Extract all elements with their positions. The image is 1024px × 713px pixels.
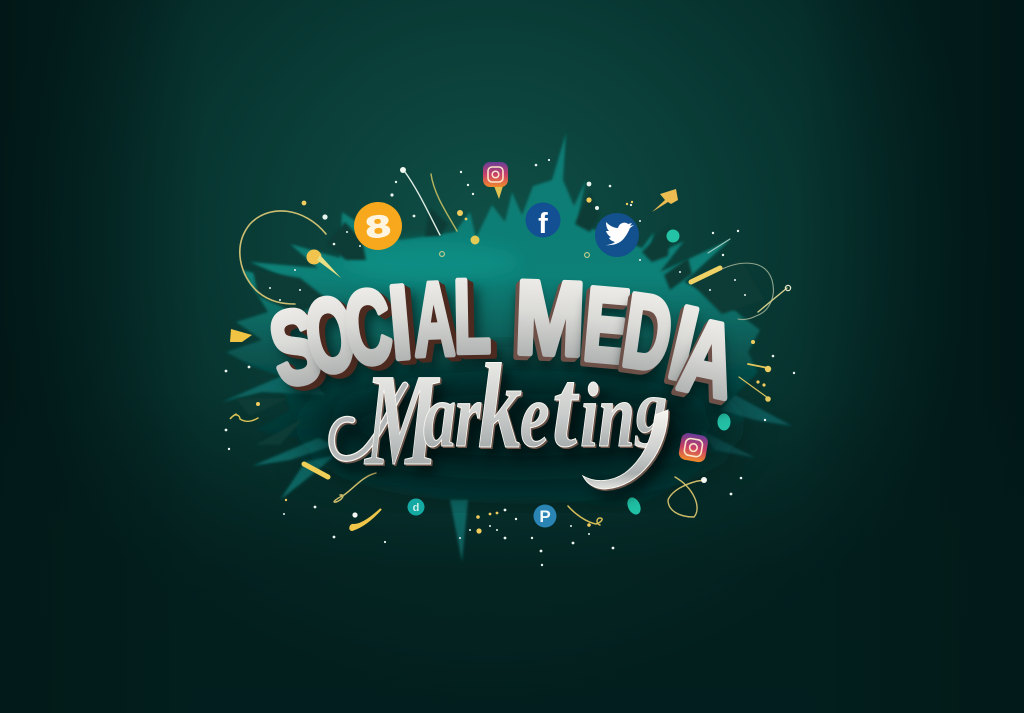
deep shadow behind lettering [310,370,730,480]
letter k: k [478,338,522,473]
pin left [306,250,322,264]
lower left squiggle [230,414,258,421]
yellow dash lower left [304,464,328,477]
word: MEDIA [513,259,746,421]
teal glow top [340,242,520,282]
letter t: t [552,347,579,470]
icon: facebook: f [538,208,548,240]
lower curl [568,506,602,525]
icon: pinterest [534,504,556,528]
word: MEDIA: M [513,259,587,377]
word: SOCIAL: O [298,275,363,397]
word: MEDIA: D [617,273,679,393]
word: SOCIAL: A [412,260,456,378]
letter a: a [423,366,456,467]
letter g: g [634,366,667,448]
icon: instagram lower [678,432,709,463]
decorative sparkles [225,159,795,566]
teal dots: d [413,502,419,514]
swash: g descender [583,410,668,489]
word: SOCIAL: S [261,285,330,409]
teal dots [408,230,730,517]
yellow swoosh lower [350,509,381,530]
word: SOCIAL: I [385,264,416,382]
lower loop line [334,473,376,502]
word: MEDIA: E [580,265,634,385]
white streak top [405,172,440,235]
icon: twitter [595,213,639,257]
icon: facebook [526,202,560,240]
right hook line [716,263,773,320]
letter n: n [598,366,635,467]
yellow markers [230,167,791,530]
subtitle: Marketing [332,338,668,493]
arrow top right [652,189,678,212]
word: SOCIAL: L [453,259,491,376]
icon: pinterest: P [539,507,551,526]
right small yellow ticks [739,377,768,398]
letter e: e [520,366,549,467]
letter r: r [455,366,481,467]
word: MEDIA: I [660,285,707,403]
letter M: M [364,346,440,493]
word: SOCIAL: C [339,267,398,388]
large gold arc left [240,211,326,304]
icon: blogger: 8 [364,209,392,245]
letter i: i [580,366,598,467]
arrow left [230,329,252,342]
swash: M entry [332,385,405,458]
dots [470,236,480,244]
gold and white accent lines [230,172,787,525]
dark speckled patches [235,192,765,445]
word: SOCIAL [261,259,491,409]
lower teal strokes [222,368,792,562]
teal paint splash [222,133,792,562]
yellow dash right [691,268,720,282]
icon: blogger [354,202,402,250]
right lower knot [668,477,704,517]
word: MEDIA: A [671,297,746,421]
gold streak top [431,174,457,231]
title: SOCIAL MEDIA [261,259,746,421]
icon: instagram top [483,162,508,199]
